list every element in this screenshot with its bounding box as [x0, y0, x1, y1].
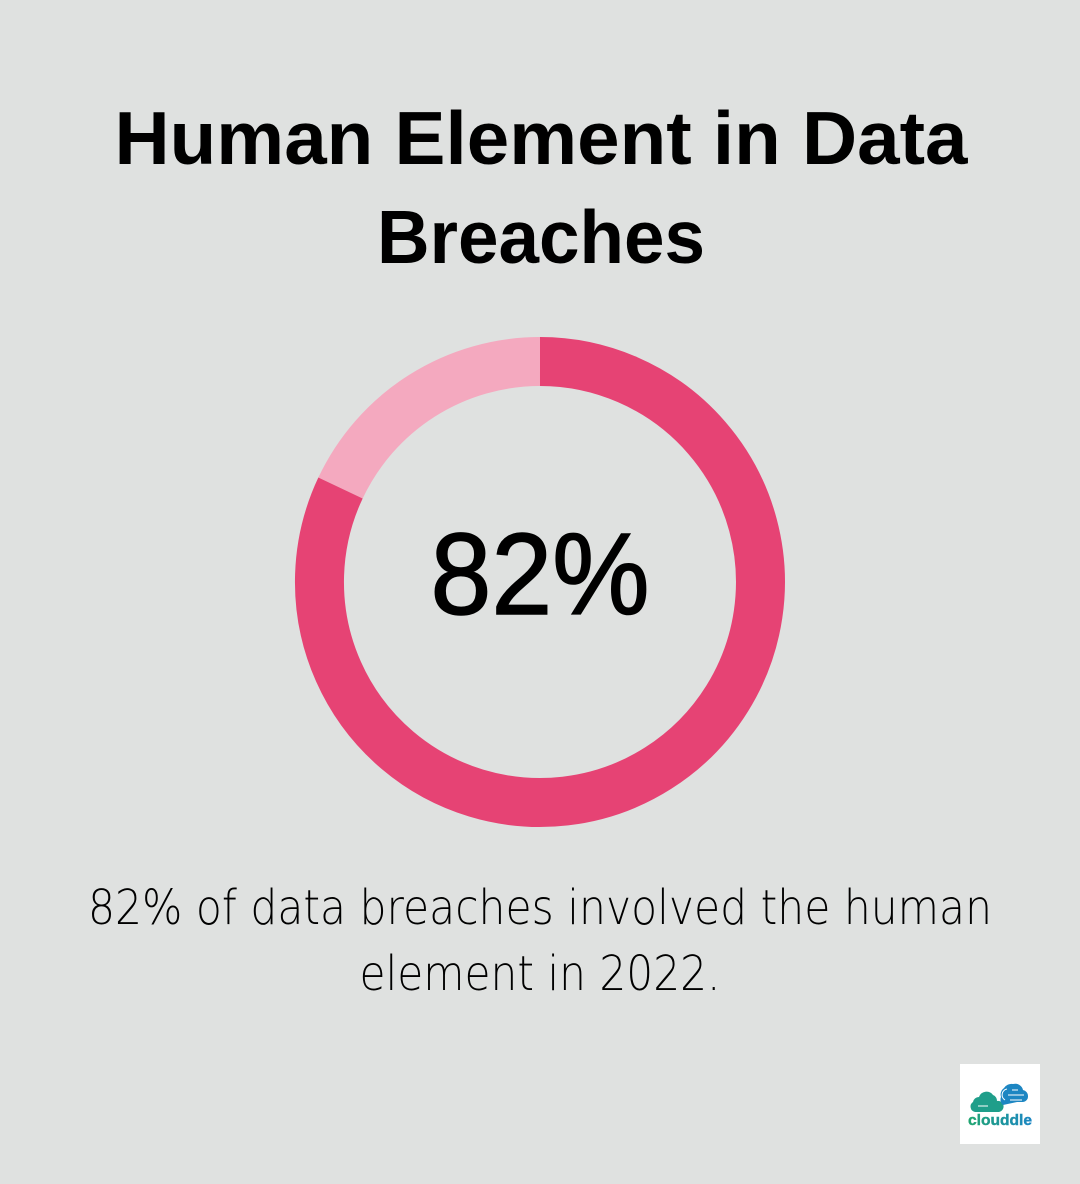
- donut value segment: 82%: [319, 362, 760, 803]
- donut remainder segment: 18%: [340, 362, 540, 488]
- title: [114, 96, 969, 279]
- description text: element in 2022.: [360, 946, 720, 1002]
- title: Breaches: [377, 195, 705, 279]
- icon: cloud swoosh gap: [978, 1089, 1024, 1106]
- donut center value: 82%: [430, 509, 650, 639]
- description text: 82% of data breaches involved the human: [88, 880, 992, 936]
- title: Human Element in Data: [114, 96, 969, 180]
- description text: [88, 880, 992, 1002]
- logo: clouddle: [960, 1064, 1040, 1144]
- icon: left cloud: [971, 1092, 1004, 1112]
- icon: right cloud: [1000, 1084, 1028, 1105]
- logo wordmark: clouddle: [968, 1112, 1032, 1129]
- donut chart: 82%: [319, 362, 760, 803]
